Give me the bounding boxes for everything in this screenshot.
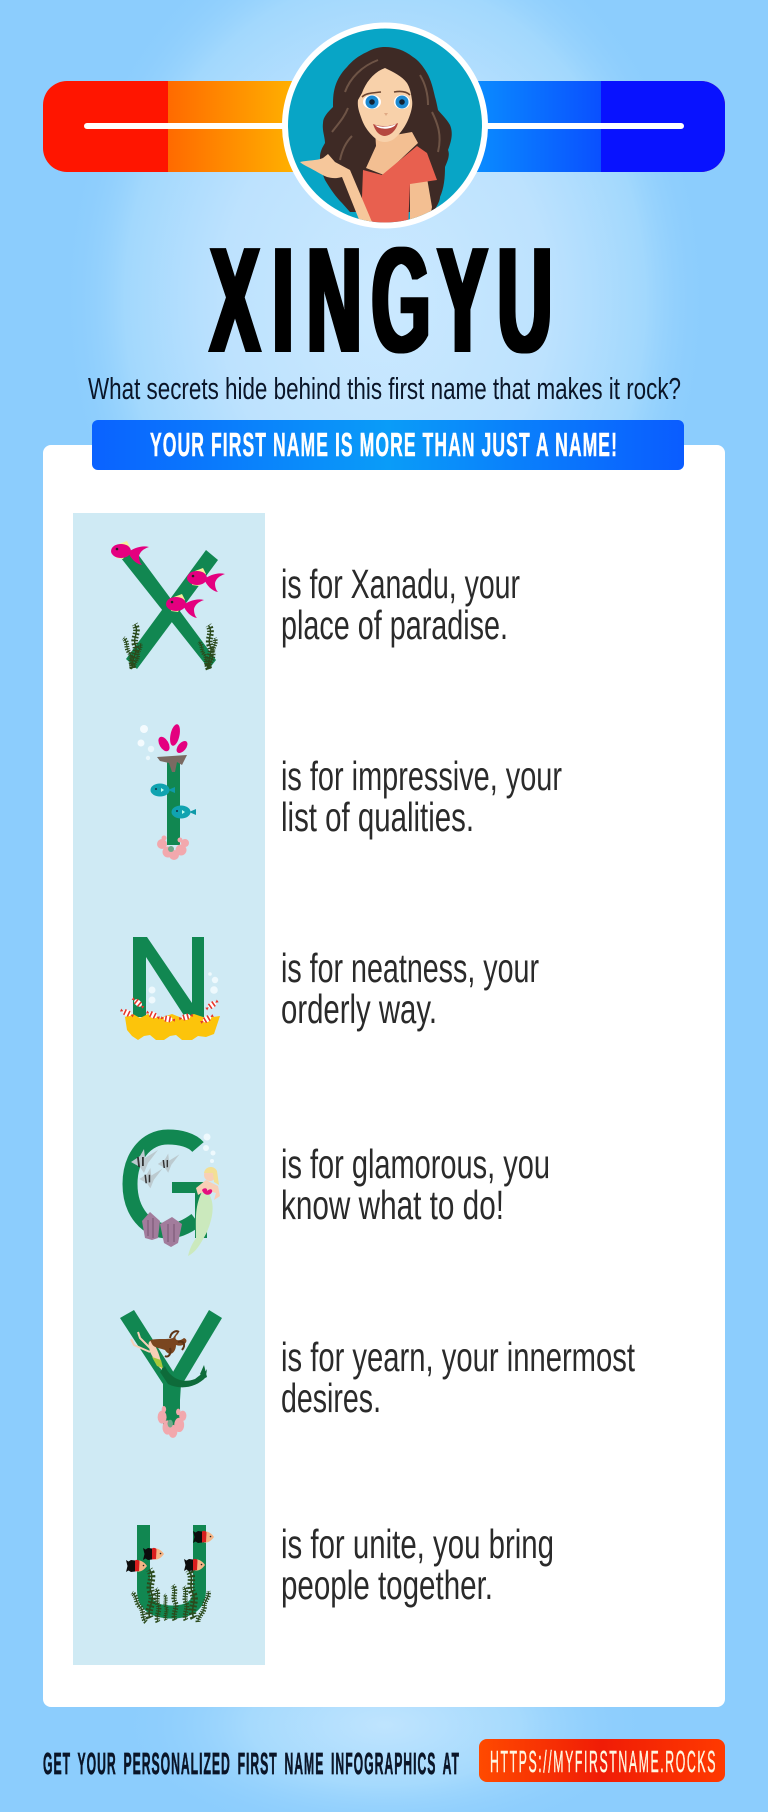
text: G: is for glamorous, you	[281, 1141, 550, 1187]
letter X illustration	[111, 541, 225, 669]
text: U: is for unite, you bring	[281, 1521, 554, 1567]
letter I illustration	[138, 723, 196, 860]
text: U	[281, 1521, 554, 1608]
letter G illustration	[130, 1134, 220, 1256]
text: N: is for neatness, your	[281, 945, 539, 991]
text: I	[281, 753, 562, 840]
text: N	[281, 945, 539, 1032]
letter Y illustration	[120, 1310, 222, 1438]
text: Y: is for yearn, your innermost	[281, 1334, 635, 1380]
footer url button	[479, 1739, 725, 1782]
text: G: know what to do!	[281, 1182, 504, 1228]
text: N: orderly way.	[281, 986, 437, 1032]
letter N illustration	[119, 937, 220, 1040]
header colour bar	[43, 81, 725, 172]
avatar portrait	[282, 22, 488, 228]
text: X: place of paradise.	[281, 602, 508, 648]
text: X: is for Xanadu, your	[281, 561, 520, 607]
text: U: people together.	[281, 1562, 493, 1608]
letter column	[73, 513, 265, 1665]
text: I: list of qualities.	[281, 794, 474, 840]
text: G	[281, 1141, 550, 1228]
letter U illustration	[126, 1525, 214, 1623]
text: Y	[281, 1334, 635, 1421]
text: X	[281, 561, 520, 648]
text: Y: desires.	[281, 1375, 381, 1421]
white content panel	[43, 445, 725, 1707]
text: I: is for impressive, your	[281, 753, 562, 799]
name title: XINGYU	[210, 217, 552, 385]
banner	[92, 420, 684, 470]
